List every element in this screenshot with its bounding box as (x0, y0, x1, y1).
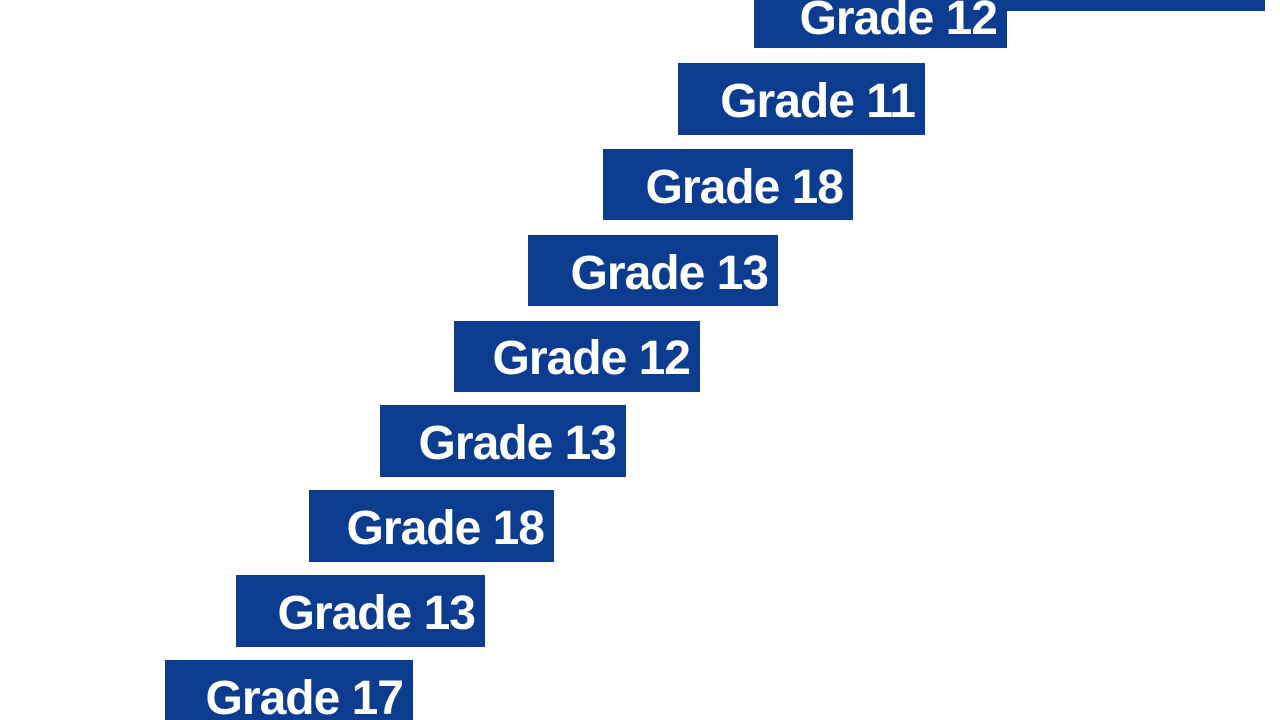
step: Grade 11 (678, 63, 925, 135)
step: Grade 18: Grade 18 (646, 161, 843, 214)
step: Grade 12: Grade 12 (493, 332, 690, 385)
step: Grade 13 second (380, 405, 626, 477)
step: Grade 18 second: Grade 18 (347, 502, 544, 555)
step: Grade 13 third (236, 575, 485, 647)
step: Grade 13 (528, 235, 778, 306)
bar: top extension (1000, 0, 1265, 11)
step: Grade 13: Grade 13 (571, 247, 768, 300)
step: Grade 11: Grade 11 (720, 75, 915, 128)
step: Grade 18 (603, 149, 853, 220)
step: Grade 17 (165, 660, 413, 720)
step: Grade 18 second (309, 490, 554, 562)
step: Grade 13 second: Grade 13 (419, 417, 616, 470)
step: Grade 13 third: Grade 13 (278, 587, 475, 640)
step: Grade 12 (454, 321, 700, 392)
